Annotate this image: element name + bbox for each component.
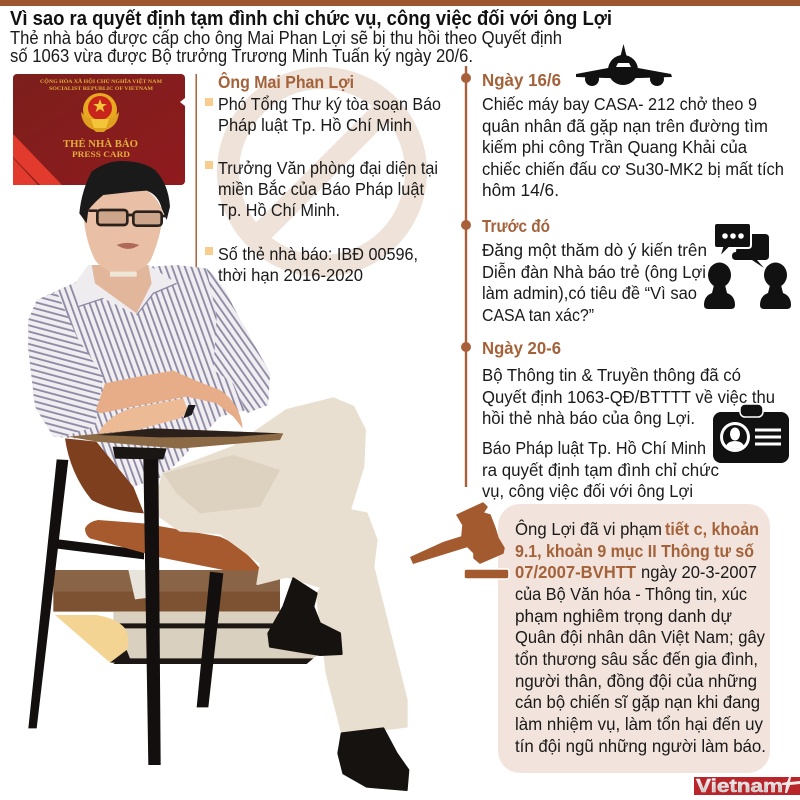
bullet: position 2: Tp. Hồ Chí Minh.: [218, 200, 340, 220]
bullet: card number: thời hạn 2016-2020: [218, 265, 363, 285]
callout: violation: 9.1, khoản 9 mục II Thông tư số: [515, 541, 754, 561]
timeline: Trước đó: làm admin),có tiêu đề “Vì sao: [482, 283, 697, 303]
icon: airplane: [576, 44, 672, 86]
profile name: Ông Mai Phan Lợi: [218, 71, 354, 92]
callout: violation: [498, 504, 770, 773]
icon: gavel: [410, 503, 509, 579]
icon: two people chatting: [704, 223, 791, 309]
bullet: position 1: Phó Tổng Thư ký tòa soạn Báo: [218, 94, 441, 114]
press card photo: CỘNG HÒA XÃ HỘI CHỦ NGHĨA VIỆT NAM: [40, 77, 163, 85]
timeline: Trước đó: Đăng một thăm dò ý kiến trên: [482, 240, 707, 260]
hair: [79, 161, 170, 223]
top bar: [0, 0, 800, 6]
callout: violation: Quân đội nhân dân Việt Nam; gây: [515, 627, 765, 647]
timeline: 20-6: Ngày 20-6: [482, 338, 561, 358]
prohibition sign watermark: [228, 78, 416, 266]
timeline: 16/6: hôm 14/6.: [482, 180, 559, 200]
bullet: position 2: [205, 158, 438, 220]
timeline: 20-6: ra quyết định tạm đình chỉ chức: [482, 460, 719, 480]
bullet: position 1: Pháp luật Tp. Hồ Chí Minh: [218, 115, 412, 135]
press card photo: SOCIALIST REPUBLIC OF VIETNAM: [49, 86, 154, 92]
callout: violation: 07/2007-BVHTT: [515, 562, 636, 582]
press card photo: THẺ NHÀ BÁO: [63, 138, 138, 150]
profile text: [205, 71, 441, 285]
bullet: position 1: [205, 94, 441, 135]
timeline: 20-6: [461, 338, 775, 501]
bullet: card number: [205, 244, 418, 285]
press card photo: [13, 74, 185, 185]
portrait photo: man seated on chair: [28, 161, 408, 790]
callout: violation: của Bộ Văn hóa - Thông tin, xúc: [515, 584, 747, 604]
timeline: 20-6: vụ, công việc đối với ông Lợi: [482, 481, 693, 501]
timeline: Trước đó: Trước đó: [482, 216, 550, 236]
shoes: [268, 578, 342, 655]
callout: violation: người thân, đồng đội của những: [515, 671, 757, 691]
subtitle: số 1063 vừa được Bộ trưởng Trương Minh Tuấn ký ngày 20/6.: [10, 46, 473, 66]
timeline: 16/6: chiếc chiến đấu cơ Su30-MK2 bị mất tích: [482, 159, 784, 179]
timeline: 16/6: [461, 70, 784, 200]
head: [79, 161, 170, 313]
glasses: [88, 210, 167, 226]
lower photo parts: [28, 438, 320, 728]
title: Vì sao ra quyết định tạm đình chỉ chức vụ, công việc đối với ông Lợi: [10, 7, 612, 30]
timeline: 20-6: Bộ Thông tin & Truyền thông đã có: [482, 365, 741, 385]
callout: violation: tín đội ngũ những người làm báo.: [515, 736, 766, 756]
divider: profile: [196, 74, 197, 283]
trousers: [68, 398, 408, 790]
bullet: position 2: miền Bắc của Báo Pháp luật: [218, 178, 424, 199]
timeline: Trước đó: Diễn đàn Nhà báo trẻ (ông Lợi: [482, 261, 706, 282]
timeline: 16/6: quân nhân đã gặp nạn trên đường tìm: [482, 116, 768, 136]
timeline: 20-6: Quyết định 1063-QĐ/BTTTT về việc thu: [482, 387, 775, 407]
callout: violation: tổn thương sâu sắc đến gia đình,: [515, 648, 758, 669]
timeline: 16/6: kiếm phi công Trần Quang Khải của: [482, 137, 747, 157]
callout: violation: cán bộ chiến sĩ gặp nạn khi đang: [515, 692, 760, 712]
callout: violation: Ông Lợi đã vi phạm: [515, 518, 662, 539]
collar: [75, 265, 177, 315]
forearms and hands: [96, 371, 243, 433]
timeline: 20-6: hồi thẻ nhà báo của ông Lợi.: [482, 408, 695, 428]
logo: Vietnam+: [694, 776, 800, 796]
bullet: card number: Số thẻ nhà báo: IBĐ 00596,: [218, 244, 418, 264]
timeline: Trước đó: [461, 216, 707, 325]
callout: violation: làm nhiệm vụ, làm tổn hại đến uy: [515, 714, 763, 734]
timeline line: [465, 66, 467, 487]
subtitle: Thẻ nhà báo được cấp cho ông Mai Phan Lợi sẽ bị thu hồi theo Quyết định: [10, 28, 562, 48]
timeline: 16/6: Ngày 16/6: [482, 70, 561, 90]
callout: violation: phạm nghiêm trọng danh dự: [515, 606, 732, 626]
callout: violation: tiết c, khoản: [665, 519, 759, 539]
front chair leg and desk: [143, 457, 161, 765]
shirt: [28, 265, 270, 487]
icon: press ID badge: [713, 404, 789, 463]
callout: violation: ngày 20-3-2007: [641, 562, 757, 582]
timeline: 16/6: Chiếc máy bay CASA- 212 chở theo 9: [482, 94, 757, 114]
press card photo: PRESS CARD: [72, 149, 130, 159]
logo: Vietnam+: Vietnam: [696, 776, 783, 796]
timeline: Trước đó: CASA tan xác?”: [482, 305, 594, 325]
bullet: position 2: Trưởng Văn phòng đại diện tại: [218, 158, 438, 178]
subtitle: [10, 28, 562, 66]
timeline: 20-6: Báo Pháp luật Tp. Hồ Chí Minh: [482, 438, 706, 458]
